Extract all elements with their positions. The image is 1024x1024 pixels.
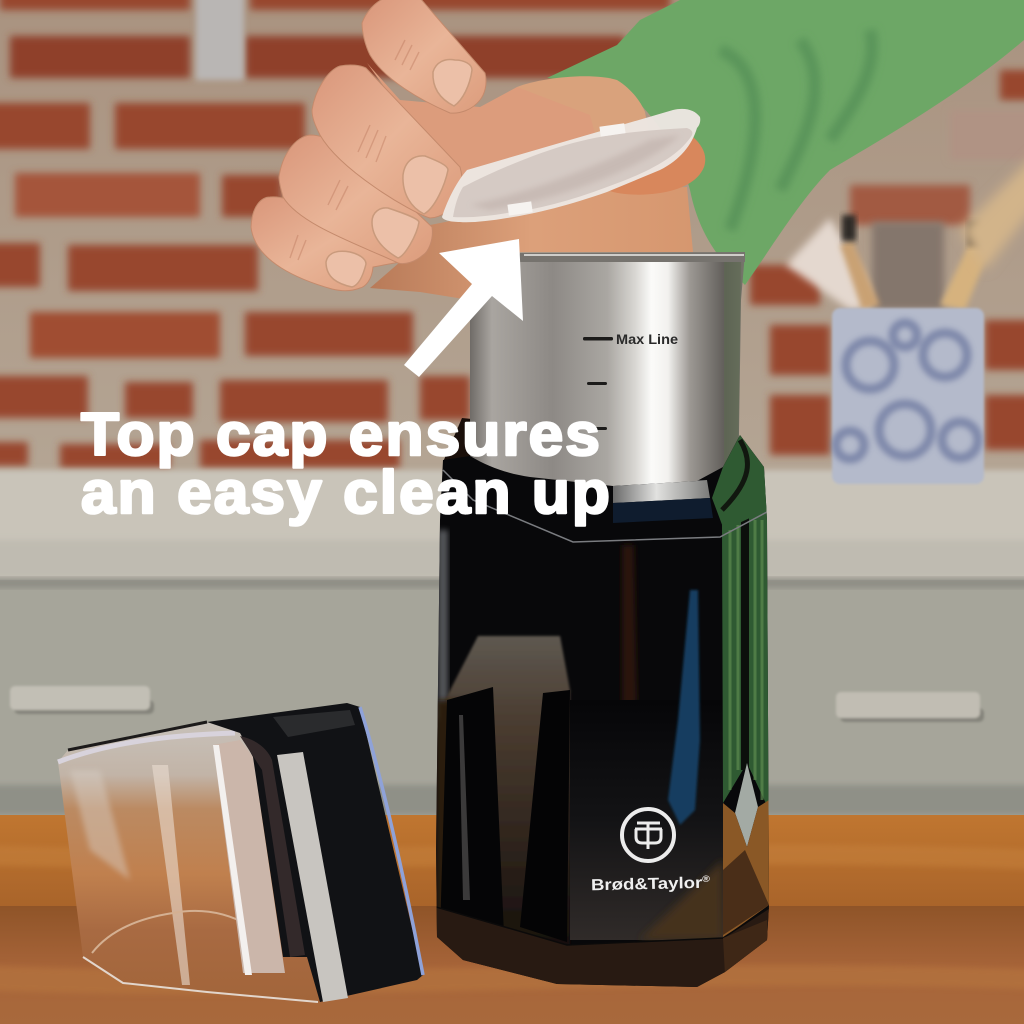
hand holding lid (251, 0, 705, 300)
collar silver band (613, 480, 710, 503)
mid mark (587, 382, 607, 385)
brand name: ® (702, 874, 710, 884)
shell streaks (152, 765, 190, 985)
thumb (607, 137, 705, 195)
max line label: Max Line (616, 331, 678, 347)
top button (273, 710, 355, 737)
dark grooves (440, 687, 504, 926)
back of hand (367, 63, 610, 210)
collar blue band (613, 498, 713, 523)
inner strip (240, 736, 305, 957)
middle finger (312, 65, 462, 218)
window reflection (735, 763, 758, 847)
silver band (277, 752, 348, 1002)
pale inner panel (213, 740, 285, 973)
background: blue pot with utensils (786, 150, 1024, 484)
grinder rear rim (443, 418, 482, 485)
max line mark (583, 337, 613, 340)
wood reflection (723, 800, 769, 938)
cover base ellipse (92, 911, 248, 953)
cabinet handle right (836, 692, 984, 722)
logo (622, 809, 674, 861)
top collar ridge (443, 470, 767, 542)
little finger (251, 197, 400, 291)
green collar (712, 435, 767, 530)
black grinder body (436, 435, 769, 1000)
front panel shading (570, 700, 723, 940)
plastic top cap (442, 109, 700, 222)
ring finger (279, 135, 432, 264)
background: counter top (0, 470, 1024, 582)
brown streak (622, 545, 637, 720)
knuckle wrinkles (290, 40, 419, 260)
heading text: an easy clean up (81, 459, 612, 526)
background: grey cabinets (0, 578, 1024, 816)
forearm (517, 76, 660, 200)
black hood (207, 703, 423, 1002)
palm under lid (370, 187, 693, 300)
clear grinder cover (58, 703, 423, 1002)
transparent shell (58, 718, 320, 1002)
index finger (362, 0, 486, 113)
cabinet handle left (10, 686, 154, 714)
white arrow (404, 239, 523, 377)
fingernails (326, 60, 472, 287)
stainless steel cup (470, 252, 745, 500)
heading text: Top cap ensures (81, 401, 602, 468)
blue rim (360, 707, 423, 975)
left edge highlight (438, 530, 448, 720)
blue reflection (668, 590, 700, 825)
brand name: Brød&Taylor (591, 875, 687, 894)
upper reflection (445, 636, 570, 945)
low mark (587, 427, 607, 430)
green sleeve (547, 0, 1024, 285)
green reflection (722, 505, 769, 810)
background: brick wall (0, 0, 1024, 480)
base below seam (436, 908, 769, 987)
shell rim (58, 733, 235, 762)
table top (0, 815, 1024, 1024)
